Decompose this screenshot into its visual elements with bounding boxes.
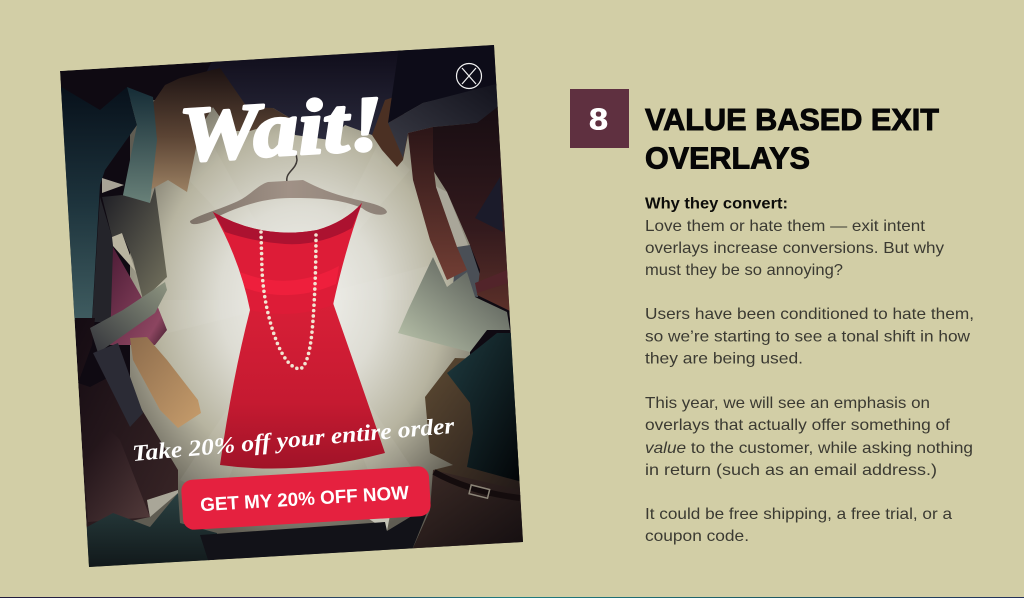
body copy: overlays that actually offer something of bbox=[645, 417, 951, 434]
body copy: in return (such as an email address.) bbox=[645, 462, 937, 479]
body copy: coupon code. bbox=[645, 528, 749, 545]
garment: dark gray skirt strip bbox=[92, 197, 113, 322]
garment: bottom left teal sweater bbox=[85, 493, 217, 570]
garment: gray under sleeve bbox=[452, 245, 480, 297]
illustration: red dress bbox=[213, 203, 385, 469]
call to action button bbox=[181, 466, 431, 530]
garment: bottom center dark bbox=[200, 514, 426, 560]
skirt bbox=[220, 303, 385, 469]
garment: dark gray skirt bbox=[102, 187, 167, 300]
body copy: Users have been conditioned to hate them, bbox=[645, 306, 974, 323]
bodice bbox=[213, 203, 362, 314]
garment: brown pants bbox=[412, 470, 525, 550]
garment: teal sleeve bbox=[122, 87, 157, 203]
button label: GET MY 20% OFF NOW bbox=[200, 483, 410, 516]
number badge: 8 bbox=[589, 102, 608, 136]
garment: rust sleeve bbox=[408, 127, 467, 280]
garment: top navy drape bbox=[207, 50, 408, 140]
pearl necklace bbox=[261, 232, 316, 369]
body copy: Love them or hate them — exit intent bbox=[645, 218, 926, 235]
gap behind dress bbox=[102, 178, 124, 193]
spotlight rays bbox=[140, 140, 450, 500]
offer line: Take 20% off your entire order bbox=[131, 413, 456, 466]
bodice highlight band bbox=[240, 266, 339, 295]
garment: sage skirt bbox=[398, 257, 510, 352]
garment: top right black bbox=[388, 40, 500, 123]
heading: VALUE BASED EXIT bbox=[645, 103, 939, 137]
popup card: tilted exit overlay illustration bbox=[58, 40, 525, 570]
bodice shaded top bbox=[213, 203, 362, 244]
heading bbox=[645, 103, 939, 176]
bottom edge line bbox=[0, 597, 1024, 598]
title: Wait!: Wait! bbox=[177, 79, 386, 178]
gap under button bbox=[369, 518, 390, 530]
body copy: value to the customer, while asking nothing bbox=[645, 440, 973, 457]
icon: hanger bbox=[190, 153, 387, 224]
heading: OVERLAYS bbox=[645, 142, 810, 176]
body copy: must they be so annoying? bbox=[645, 262, 843, 279]
button shape bbox=[181, 466, 431, 530]
belt buckle bbox=[469, 485, 490, 498]
body copy: This year, we will see an emphasis on bbox=[645, 395, 930, 412]
garment: brown inner panel bbox=[86, 451, 150, 522]
rust belt bbox=[475, 270, 508, 293]
body copy: they are being used. bbox=[645, 350, 803, 368]
body copy: overlays increase conversions. But why bbox=[645, 240, 944, 257]
garment: right shoulder navy bbox=[388, 83, 500, 158]
body copy: so we’re starting to see a tonal shift in how bbox=[645, 328, 970, 346]
garment: navy panel bbox=[475, 177, 503, 232]
gap beside skirt bbox=[112, 233, 136, 272]
body copy bbox=[645, 196, 974, 545]
body copy: Why they convert: bbox=[645, 196, 788, 212]
card artwork bbox=[58, 40, 525, 570]
garment: maroon top bbox=[110, 247, 167, 345]
garment: right rust jacket bbox=[433, 105, 512, 312]
garment: brown blouse bbox=[150, 68, 290, 192]
spotlight glow bbox=[130, 100, 470, 550]
number badge bbox=[570, 89, 629, 148]
garment: brown lower jacket bbox=[425, 358, 525, 495]
garment: brown drape right of title bbox=[372, 95, 408, 167]
garment: teal right sweater bbox=[447, 333, 522, 482]
icon: close button bbox=[456, 64, 482, 88]
garment: gray sleeve band bbox=[90, 282, 167, 353]
gap bottom left bbox=[147, 490, 178, 517]
gap beside rust sleeve bbox=[436, 186, 468, 247]
garment: dark gray sleeve bbox=[93, 343, 143, 427]
belt bbox=[434, 472, 520, 498]
dark backdrop bbox=[60, 45, 523, 567]
garment: tan sleeve bbox=[130, 337, 201, 428]
body copy: It could be free shipping, a free trial, or a bbox=[645, 506, 952, 523]
garment: lower left dark wrap bbox=[75, 318, 178, 530]
garment: teal dress bbox=[58, 85, 137, 320]
